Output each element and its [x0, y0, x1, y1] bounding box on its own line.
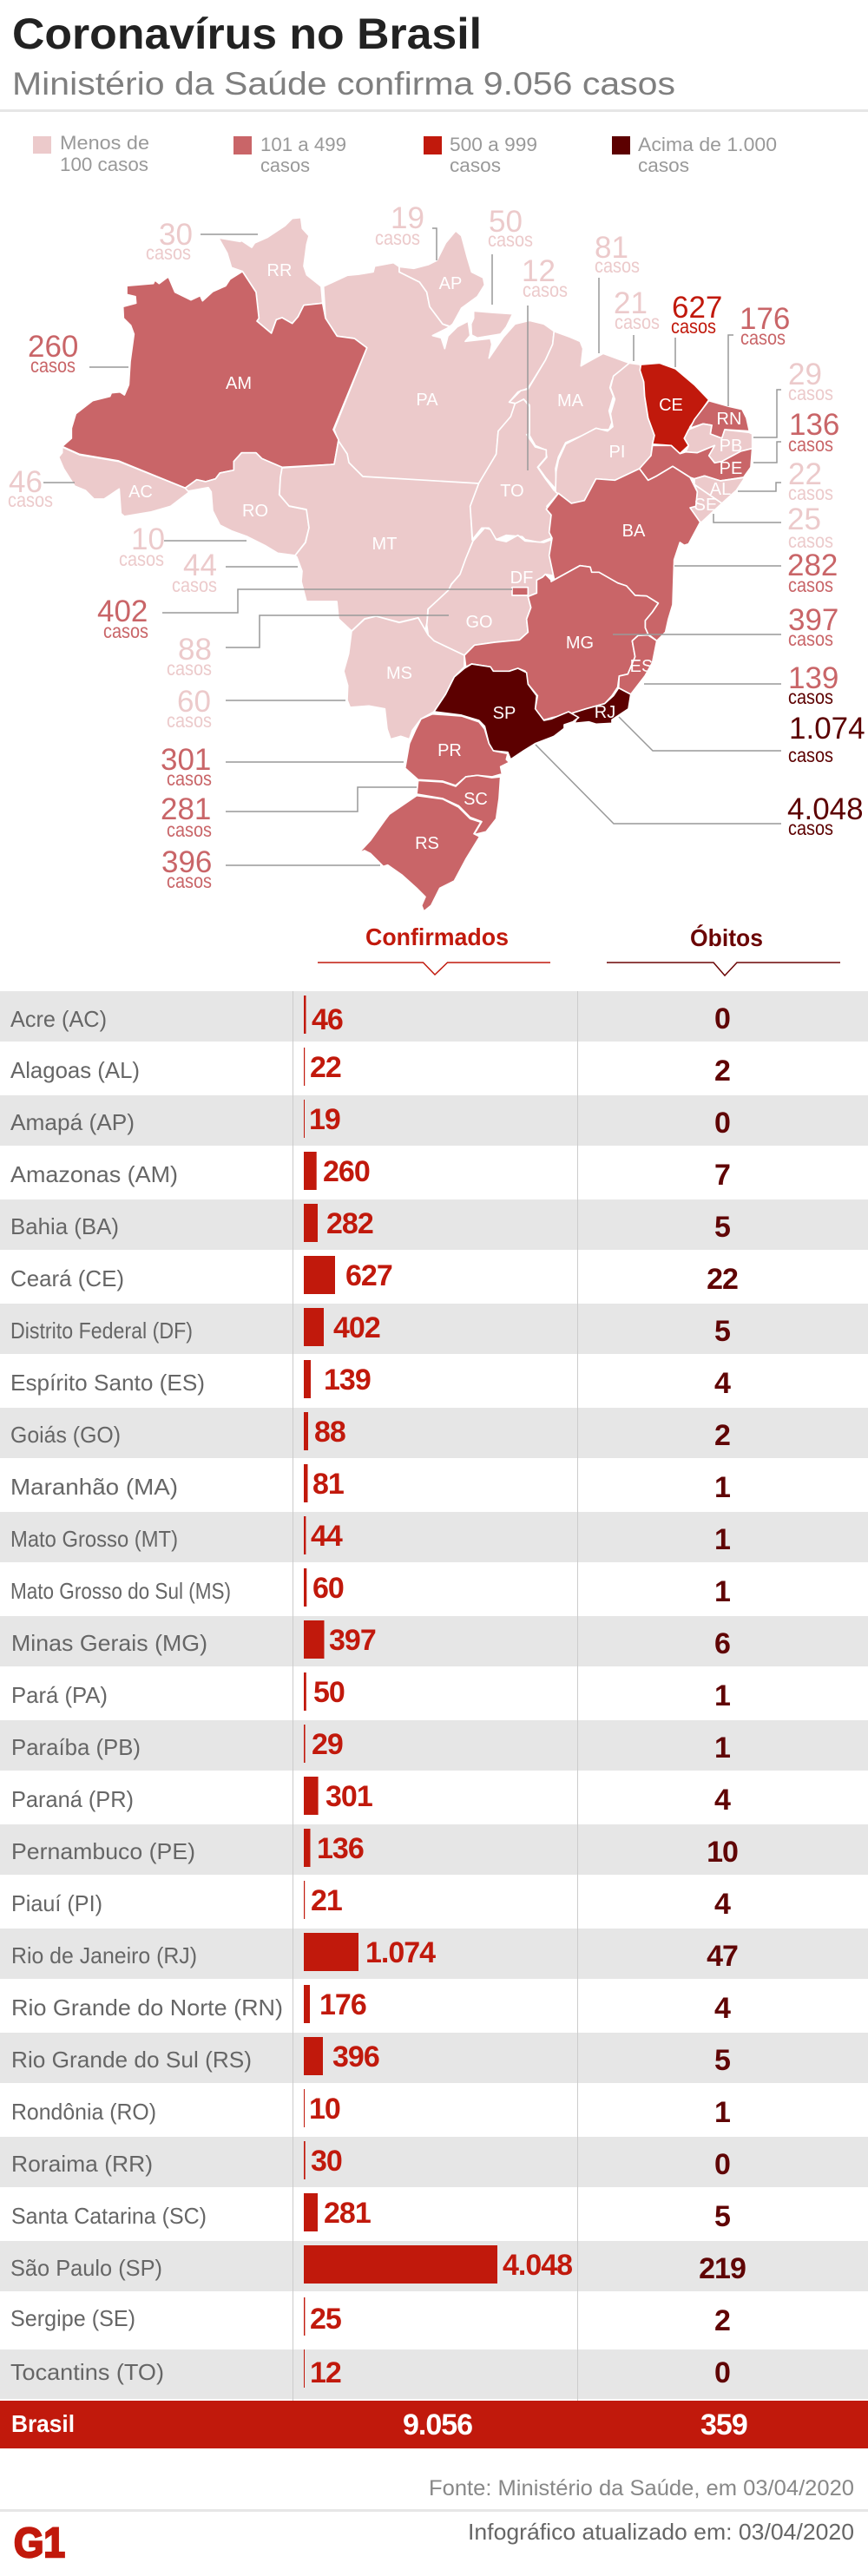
label: TO 12: 12 [522, 254, 556, 288]
subtitle: Ministério da Saúde confirma 9.056 casos [12, 66, 675, 102]
legend item: menos de 100 casos [33, 132, 149, 175]
row: Rondônia: 1 [714, 2096, 730, 2129]
row: Espírito Santo: 139 [324, 1364, 371, 1396]
update date: Infográfico atualizado em: 03/04/2020 [468, 2519, 854, 2545]
legend item: acima de 1.000 casos: Acima de 1.000 [638, 134, 777, 155]
label: SE 25: 25 [787, 503, 821, 536]
row: Minas Gerais: Minas Gerais (MG) [11, 1630, 207, 1656]
row: Paraíba: Paraíba (PB) [11, 1734, 141, 1760]
state abbreviations: GO [465, 613, 493, 632]
state: MG [464, 566, 658, 720]
row: Rio de Janeiro: 1.074 [365, 1936, 436, 1969]
row: Paraná: 4 [714, 1784, 731, 1817]
row: Pernambuco [0, 1824, 868, 1875]
state abbreviations: ES [630, 657, 653, 676]
map of Brazil [59, 218, 753, 911]
row: Rio de Janeiro [0, 1929, 868, 1979]
row: Mato Grosso: Mato Grosso (MT) [10, 1526, 178, 1552]
state: AC [59, 447, 189, 516]
row: Distrito Federal: Distrito Federal (DF) [10, 1318, 193, 1344]
state abbreviations: AC [128, 483, 153, 502]
label: MA 81 [595, 231, 640, 277]
row: Brasil total [0, 2401, 868, 2448]
label: RJ 1.074: 1.074 [789, 712, 865, 746]
state abbreviations: AL [710, 480, 731, 499]
state abbreviations: MS [386, 664, 412, 683]
label: CE 627: 627 [672, 291, 722, 325]
label: AP 19 [375, 201, 424, 249]
state: AL [694, 476, 745, 503]
row: Rio Grande do Norte: 4 [714, 1992, 731, 2025]
row: Rondônia: Rondônia (RO) [11, 2099, 156, 2125]
row: Pará [11, 1672, 730, 1712]
state abbreviations: PI [609, 443, 625, 462]
label: CE 627: casos [671, 315, 716, 338]
label: MT 44 [172, 549, 217, 596]
row: Alagoas [10, 1048, 730, 1088]
legend item: 101 a 499 casos: casos [260, 154, 310, 176]
state abbreviations: RN [717, 410, 741, 429]
row: Ceará [10, 1256, 738, 1296]
state: ES [619, 635, 657, 694]
label: TO 12 [522, 254, 568, 301]
row: Rio Grande do Norte [11, 1985, 731, 2025]
label: MA 81: 81 [595, 231, 628, 265]
label: BA 282: casos [788, 574, 833, 596]
row: Pará: 1 [714, 1679, 730, 1712]
row: Paraíba [0, 1720, 868, 1771]
state abbreviations: RS [415, 834, 439, 853]
row: Bahia: Bahia (BA) [10, 1213, 119, 1239]
label: PB 29: 29 [788, 358, 822, 391]
row: Sergipe: 2 [714, 2304, 730, 2337]
label: RR 30: 30 [159, 218, 193, 252]
label: ES 139: casos [788, 686, 833, 708]
label: PB 29: casos [788, 382, 833, 404]
row: Minas Gerais: 6 [714, 1627, 730, 1660]
state: SC [417, 775, 501, 835]
label: AP 19: casos [375, 227, 420, 249]
row: Espírito Santo: 4 [714, 1367, 731, 1400]
label: AL 22: 22 [788, 457, 822, 491]
row: Bahia: 5 [714, 1211, 730, 1244]
label: AC 46: casos [8, 489, 53, 511]
row: Minas Gerais: 397 [329, 1624, 376, 1657]
state abbreviations [128, 261, 742, 853]
label: SP 4.048: casos [788, 817, 833, 839]
label: RN 176: 176 [740, 302, 790, 336]
label: TO 12: casos [523, 279, 568, 301]
label: AC 46: 46 [9, 465, 43, 499]
row: Tocantins: 0 [714, 2356, 730, 2389]
row: Distrito Federal: 5 [714, 1315, 730, 1348]
label: MT 44: casos [172, 574, 217, 596]
state abbreviations: AM [226, 374, 252, 393]
state abbreviations: MG [566, 634, 594, 653]
row: Acre: Acre (AC) [10, 1006, 107, 1032]
state abbreviations: SC [464, 790, 488, 809]
label: RJ 1.074 [788, 712, 865, 766]
label: PE 136 [788, 408, 839, 456]
label: MS 60: casos [167, 709, 212, 732]
legend item: 500 a 999 casos: 500 a 999 [450, 134, 537, 155]
state abbreviations: AP [439, 274, 462, 293]
row: Amazonas: Amazonas (AM) [10, 1161, 178, 1187]
state abbreviations: PE [720, 459, 742, 478]
row: Mato Grosso do Sul: 1 [714, 1575, 730, 1608]
row: São Paulo: 219 [699, 2252, 746, 2285]
row: Paraíba: 29 [312, 1728, 343, 1761]
legend item: 101 a 499 casos [233, 134, 346, 176]
label: GO 88: casos [167, 657, 212, 680]
map value labels [8, 201, 865, 892]
label: PI 21 [614, 286, 660, 333]
row: Pará: 50 [313, 1676, 345, 1709]
row: Mato Grosso do Sul [10, 1568, 730, 1608]
row: Pernambuco: 136 [317, 1832, 364, 1865]
state abbreviations: BA [622, 522, 646, 541]
row: Roraima: 0 [714, 2148, 730, 2181]
table [0, 991, 868, 2448]
label: RO 10: casos [119, 548, 164, 570]
label: MG 397: 397 [788, 603, 838, 637]
state: PI [556, 363, 654, 504]
row: Rio de Janeiro: 47 [707, 1940, 738, 1973]
row: Maranhão [10, 1464, 730, 1504]
row: Amapá: 19 [309, 1103, 340, 1136]
row: Brasil total: Brasil [11, 2410, 75, 2437]
row: Tocantins: Tocantins (TO) [10, 2359, 164, 2385]
row: Goiás: 2 [714, 1419, 730, 1452]
label: RO 10: 10 [131, 522, 165, 556]
state: RJ [569, 688, 631, 724]
title: Coronavírus no Brasil [12, 10, 482, 58]
state: MS [344, 616, 464, 739]
row: Mato Grosso: 1 [714, 1523, 730, 1556]
state abbreviations: RJ [595, 703, 615, 722]
column header: Confirmados [318, 923, 550, 975]
row: Goiás: Goiás (GO) [10, 1422, 121, 1448]
legend item: acima de 1.000 casos [612, 134, 777, 176]
row: Amazonas [10, 1152, 730, 1192]
label: RN 176: casos [740, 326, 786, 349]
state: SE [690, 484, 722, 522]
state: SP [434, 664, 579, 759]
row: Alagoas: 2 [714, 1055, 730, 1088]
row: Rio Grande do Sul: Rio Grande do Sul (RS) [11, 2047, 252, 2073]
label: PB 29 [788, 358, 833, 404]
label: MS 60: 60 [177, 685, 211, 719]
legend item: 500 a 999 casos [424, 134, 537, 176]
legend item: menos de 100 casos: Menos de [60, 132, 149, 154]
state: AP [399, 231, 484, 326]
row: Bahia: 282 [326, 1207, 373, 1240]
state: PE [640, 445, 753, 481]
state: RS [358, 796, 481, 911]
column header: Confirmados: Confirmados [365, 923, 509, 950]
row: Piauí: 4 [714, 1888, 731, 1921]
state: GO [427, 528, 554, 655]
label: AL 22 [788, 457, 833, 504]
label: SP 4.048: 4.048 [787, 792, 864, 826]
legend item: 101 a 499 casos: 101 a 499 [260, 134, 346, 155]
label: PI 21: casos [615, 311, 660, 333]
row: Distrito Federal: 402 [333, 1311, 380, 1344]
row: Paraná: 301 [326, 1780, 372, 1813]
leader lines [43, 228, 781, 865]
row: Amazonas: 260 [323, 1155, 370, 1188]
row: Maranhão: Maranhão (MA) [10, 1474, 178, 1500]
row: Santa Catarina [11, 2193, 730, 2233]
row: Acre: 0 [714, 1002, 730, 1035]
row: Tocantins [0, 2349, 868, 2399]
row: Goiás: 88 [314, 1416, 345, 1449]
row: Mato Grosso [0, 1512, 868, 1562]
state abbreviations: MA [557, 391, 584, 411]
row: Mato Grosso do Sul: Mato Grosso do Sul (MS) [10, 1578, 231, 1604]
label: BA 282: 282 [787, 549, 838, 582]
row: Brasil total: 359 [700, 2408, 747, 2441]
state: RN [690, 401, 749, 438]
row: Ceará: Ceará (CE) [10, 1265, 124, 1291]
row: Acre [0, 991, 868, 1042]
label: RJ 1.074: casos [788, 744, 833, 766]
row: Goiás [0, 1408, 868, 1458]
row: Paraíba: 1 [714, 1732, 730, 1764]
label: GO 88 [167, 633, 212, 680]
row: Pernambuco: Pernambuco (PE) [11, 1838, 195, 1864]
state abbreviations: MT [372, 535, 397, 554]
state: MT [279, 441, 479, 631]
row: Mato Grosso do Sul: 60 [312, 1572, 344, 1605]
state: CE [640, 363, 709, 454]
row: Amapá: 0 [714, 1107, 730, 1140]
row: Espírito Santo [10, 1360, 731, 1400]
row: Rio Grande do Sul [0, 2033, 868, 2083]
label: PR 301: 301 [161, 743, 211, 777]
state: TO [470, 399, 558, 542]
label: MT 44: 44 [183, 549, 217, 582]
row: Roraima: Roraima (RR) [11, 2151, 153, 2177]
row: Alagoas: 22 [310, 1051, 341, 1084]
label: RR 30: casos [146, 241, 191, 264]
row: Sergipe: Sergipe (SE) [10, 2305, 135, 2331]
row: Rondônia [11, 2089, 730, 2129]
row: Rio Grande do Sul: 5 [714, 2044, 730, 2077]
row: São Paulo: 4.048 [503, 2249, 572, 2282]
label: AC 46 [8, 465, 53, 511]
label: SE 25 [787, 503, 833, 552]
row: Sergipe [10, 2297, 730, 2337]
row: Brasil total: 9.056 [403, 2408, 472, 2441]
row: Paraná [11, 1777, 731, 1817]
state abbreviations: CE [659, 396, 683, 415]
label: ES 139: 139 [788, 661, 838, 695]
label: AM 260: 260 [28, 330, 78, 364]
label: RS 396: casos [167, 870, 212, 892]
state: PB [684, 424, 753, 463]
source: Fonte: Ministério da Saúde, em 03/04/2020 [429, 2476, 854, 2500]
label: RS 396: 396 [161, 845, 212, 879]
label: PE 136: casos [788, 433, 833, 456]
row: Piauí [11, 1881, 731, 1921]
state abbreviations: RO [242, 502, 268, 521]
row: Rio Grande do Norte: Rio Grande do Norte (RN) [11, 1994, 283, 2021]
legend item: acima de 1.000 casos: casos [638, 154, 689, 176]
label: PR 301: casos [167, 767, 212, 790]
row: Pará: Pará (PA) [11, 1682, 108, 1708]
label: SC 281: casos [167, 818, 212, 841]
state abbreviations: PA [416, 391, 438, 410]
state: PR [405, 714, 510, 785]
label: PE 136: 136 [789, 408, 839, 442]
row: Amapá: Amapá (AP) [10, 1109, 135, 1135]
state abbreviations: PR [437, 741, 462, 760]
row: Espírito Santo: Espírito Santo (ES) [10, 1370, 205, 1396]
G1 logo: G1 [14, 2520, 65, 2566]
state: MA [510, 332, 629, 490]
label: DF 402: casos [103, 620, 148, 642]
state: DF [512, 588, 528, 595]
state abbreviations: TO [500, 482, 524, 501]
legend item: menos de 100 casos: 100 casos [60, 154, 148, 175]
column header: Óbitos: Óbitos [690, 924, 763, 951]
row: Minas Gerais [0, 1616, 868, 1666]
label: DF 402: 402 [97, 595, 148, 628]
label: AM 260: casos [30, 354, 76, 377]
label: GO 88: 88 [178, 633, 212, 667]
row: Rio de Janeiro: Rio de Janeiro (RJ) [11, 1942, 197, 1968]
state: PA [324, 263, 554, 483]
label: AP 19: 19 [391, 201, 424, 235]
state: RR [219, 218, 323, 333]
row: Amapá [0, 1095, 868, 1146]
row: Piauí: 21 [311, 1884, 342, 1917]
state: AM [62, 272, 367, 488]
row: Roraima: 30 [311, 2145, 342, 2178]
row: Tocantins: 12 [310, 2356, 341, 2389]
label: RO 10 [119, 522, 165, 570]
state: Marajó island (PA) [471, 311, 513, 338]
label: SC 281 [161, 792, 212, 841]
row: Santa Catarina: Santa Catarina (SC) [11, 2203, 207, 2229]
label: SE 25: casos [788, 529, 833, 552]
row: Distrito Federal [0, 1304, 868, 1354]
row: Sergipe: 25 [310, 2303, 341, 2336]
label: PA 50 [488, 205, 533, 251]
label: MS 60 [167, 685, 212, 732]
state abbreviations: SP [493, 704, 516, 723]
row: Roraima [0, 2137, 868, 2187]
row: Bahia [0, 1199, 868, 1250]
row: Pernambuco: 10 [707, 1836, 738, 1869]
row: Mato Grosso: 44 [311, 1520, 343, 1553]
column header: Óbitos [607, 924, 840, 976]
row: Amazonas: 7 [714, 1159, 730, 1192]
row: Rio Grande do Sul: 396 [332, 2040, 379, 2073]
row: Ceará: 22 [707, 1263, 738, 1296]
row: Paraná: Paraná (PR) [11, 1786, 134, 1812]
row: Maranhão: 81 [312, 1468, 344, 1501]
row: Piauí: Piauí (PI) [11, 1890, 102, 1916]
row: Ceará: 627 [345, 1259, 392, 1292]
row: Alagoas: Alagoas (AL) [10, 1057, 140, 1083]
label: PA 50: 50 [489, 205, 523, 239]
label: PI 21: 21 [614, 286, 648, 320]
label: MA 81: casos [595, 254, 640, 277]
label: MG 397: casos [788, 628, 833, 650]
legend [33, 132, 777, 176]
state abbreviations: RR [267, 261, 292, 280]
state abbreviations: PB [720, 437, 742, 456]
row: Rio Grande do Norte: 176 [319, 1988, 366, 2021]
label: SC 281: 281 [161, 792, 211, 826]
row: São Paulo: São Paulo (SP) [10, 2255, 162, 2281]
row: São Paulo [0, 2241, 868, 2291]
row: Santa Catarina: 281 [324, 2197, 371, 2230]
label: RR 30 [146, 218, 193, 264]
label: AL 22: casos [788, 482, 833, 504]
state: BA [546, 466, 700, 641]
state abbreviations: DF [510, 568, 533, 588]
label: PA 50: casos [488, 228, 533, 251]
row: Rondônia: 10 [309, 2093, 340, 2126]
row: Maranhão: 1 [714, 1471, 730, 1504]
legend item: 500 a 999 casos: casos [450, 154, 501, 176]
state abbreviations: SE [694, 496, 717, 515]
state: RO [185, 453, 309, 555]
row: Acre: 46 [312, 1003, 343, 1036]
row: Santa Catarina: 5 [714, 2200, 730, 2233]
